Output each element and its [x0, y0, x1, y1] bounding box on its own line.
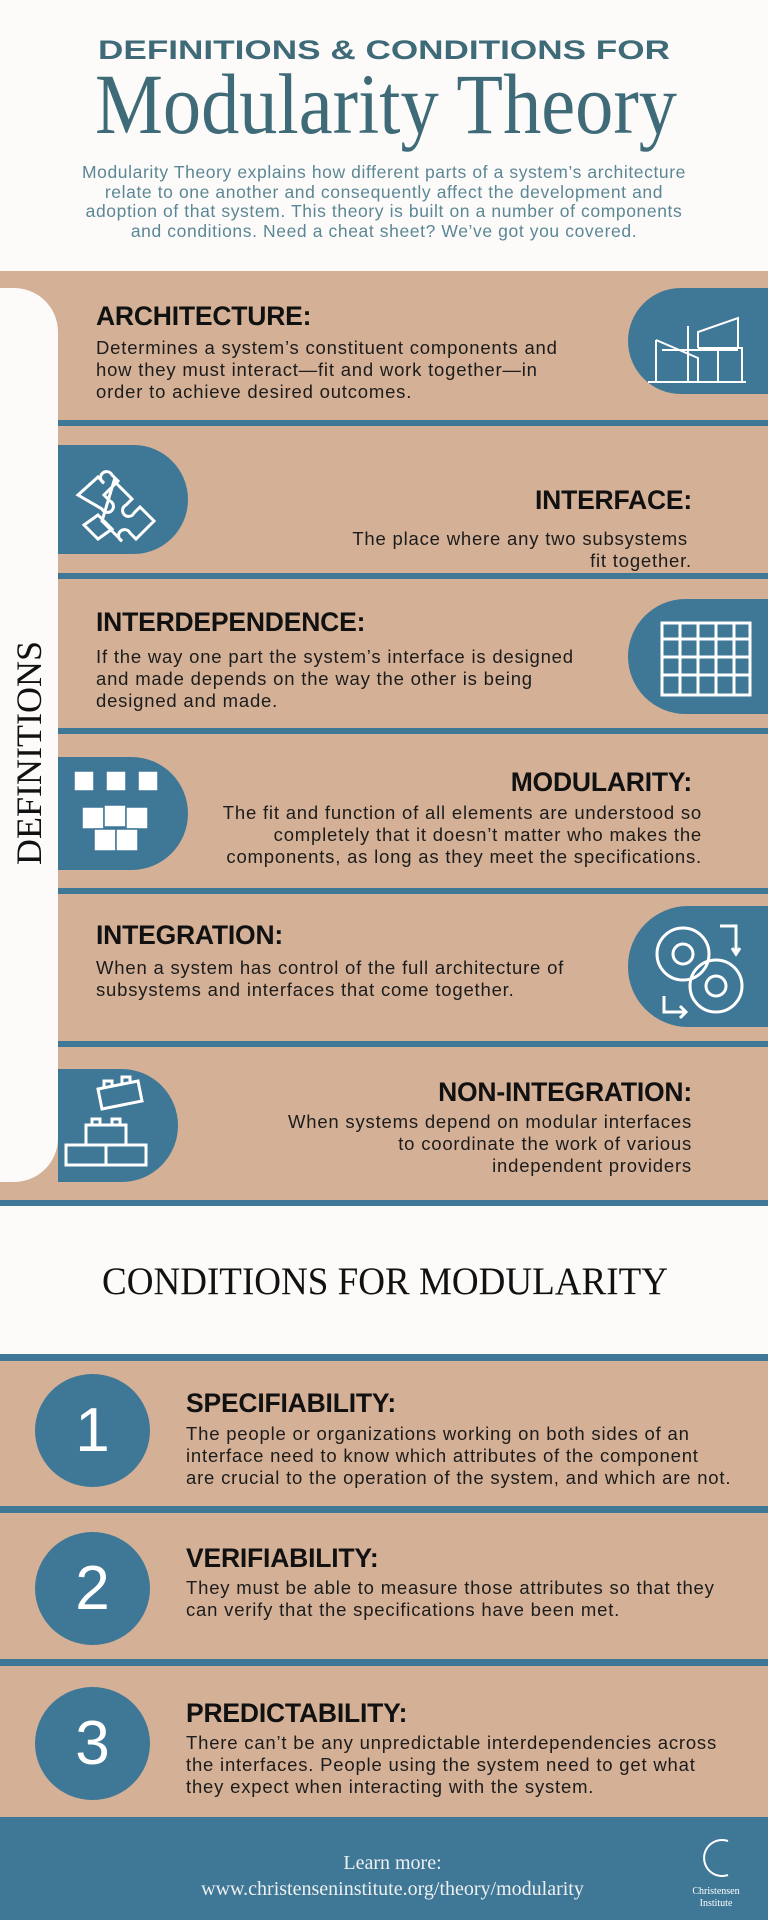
intro paragraph: relate to one another and consequently affect the development and [105, 182, 663, 202]
learn more text [201, 1852, 584, 1900]
body: they expect when interacting with the system. [186, 1776, 594, 1797]
heading: PREDICTABILITY: [186, 1698, 407, 1728]
icon: bricks [58, 1069, 178, 1182]
learn more text: www.christenseninstitute.org/theory/modularity [201, 1878, 584, 1900]
body [96, 337, 558, 402]
body: fit together. [590, 550, 692, 571]
body: subsystems and interfaces that come together. [96, 979, 515, 1000]
body: When systems depend on modular interfaces [288, 1111, 692, 1132]
body: Determines a system’s constituent components and [96, 337, 558, 358]
interdependence [96, 599, 768, 714]
body: completely that it doesn’t matter who makes the [274, 824, 702, 845]
number circle 3 [35, 1687, 150, 1800]
body: The people or organizations working on both sides of an [186, 1423, 690, 1444]
definitions side tab [0, 288, 58, 1182]
non-integration [58, 1069, 692, 1182]
number circle 1: 1 [75, 1396, 110, 1465]
heading: NON-INTEGRATION: [438, 1077, 692, 1107]
body: and made depends on the way the other is being [96, 668, 533, 689]
body: can verify that the specifications have been met. [186, 1599, 620, 1620]
number circle 2 [35, 1532, 150, 1645]
body: The place where any two subsystems [352, 528, 688, 549]
logo: Institute [700, 1898, 732, 1909]
condition 1 [35, 1374, 731, 1488]
body [186, 1732, 717, 1797]
condition 3 [35, 1687, 717, 1800]
integration [96, 906, 768, 1027]
heading: ARCHITECTURE: [96, 301, 311, 331]
body: independent providers [492, 1155, 692, 1176]
icon: cubes [58, 757, 188, 870]
learn more text: Learn more: [343, 1852, 442, 1874]
heading: INTEGRATION: [96, 920, 283, 950]
heading: MODULARITY: [511, 767, 692, 797]
intro paragraph: and conditions. Need a cheat sheet? We’ve got you covered. [131, 221, 637, 241]
body: components, as long as they meet the specifications. [226, 846, 702, 867]
heading: VERIFIABILITY: [186, 1543, 379, 1573]
body: order to achieve desired outcomes. [96, 381, 412, 402]
architecture [96, 288, 768, 402]
body [96, 957, 564, 1000]
body [288, 1111, 692, 1176]
heading: INTERFACE: [535, 485, 692, 515]
vertical label DEFINITIONS: DEFINITIONS [9, 641, 49, 865]
heading: SPECIFIABILITY: [186, 1388, 396, 1418]
panel: definitions background [0, 271, 768, 1204]
intro paragraph: adoption of that system. This theory is built on a number of components [86, 201, 682, 221]
intro paragraph: Modularity Theory explains how different parts of a system’s architecture [82, 162, 686, 182]
footer [0, 1817, 768, 1920]
body: designed and made. [96, 690, 278, 711]
number circle 2: 2 [75, 1554, 110, 1623]
body: The fit and function of all elements are understood so [223, 802, 702, 823]
body [96, 646, 574, 711]
body: the interfaces. People using the system need to get what [186, 1754, 696, 1775]
modularity [58, 757, 702, 870]
body [352, 528, 692, 571]
icon: gears [628, 906, 768, 1027]
body [186, 1423, 731, 1488]
number circle 1 [35, 1374, 150, 1487]
body [186, 1577, 715, 1620]
heading: conditions for modularity: CONDITIONS FOR MODULARITY [102, 1260, 668, 1303]
body: to coordinate the work of various [398, 1133, 692, 1154]
panel: conditions background [0, 1357, 768, 1817]
logo: Christensen [692, 1886, 740, 1897]
icon: weave [628, 599, 768, 714]
intro paragraph [82, 162, 686, 241]
condition 2 [35, 1532, 715, 1645]
logo [692, 1839, 740, 1909]
icon: architecture [628, 288, 768, 394]
body: interface need to know which attributes of the component [186, 1445, 699, 1466]
body: are crucial to the operation of the system, and which are not. [186, 1467, 731, 1488]
icon: puzzle [58, 445, 188, 554]
number circle 3: 3 [75, 1709, 110, 1778]
header title small: Modularity Theory [95, 56, 677, 152]
body: There can’t be any unpredictable interdependencies across [186, 1732, 717, 1753]
body: If the way one part the system’s interface is designed [96, 646, 574, 667]
body: They must be able to measure those attributes so that they [186, 1577, 715, 1598]
heading: INTERDEPENDENCE: [96, 607, 365, 637]
interface [58, 445, 692, 571]
body [223, 802, 702, 867]
body: When a system has control of the full architecture of [96, 957, 564, 978]
body: how they must interact—fit and work together—in [96, 359, 538, 380]
header title small: DEFINITIONS & CONDITIONS FOR [98, 35, 670, 65]
